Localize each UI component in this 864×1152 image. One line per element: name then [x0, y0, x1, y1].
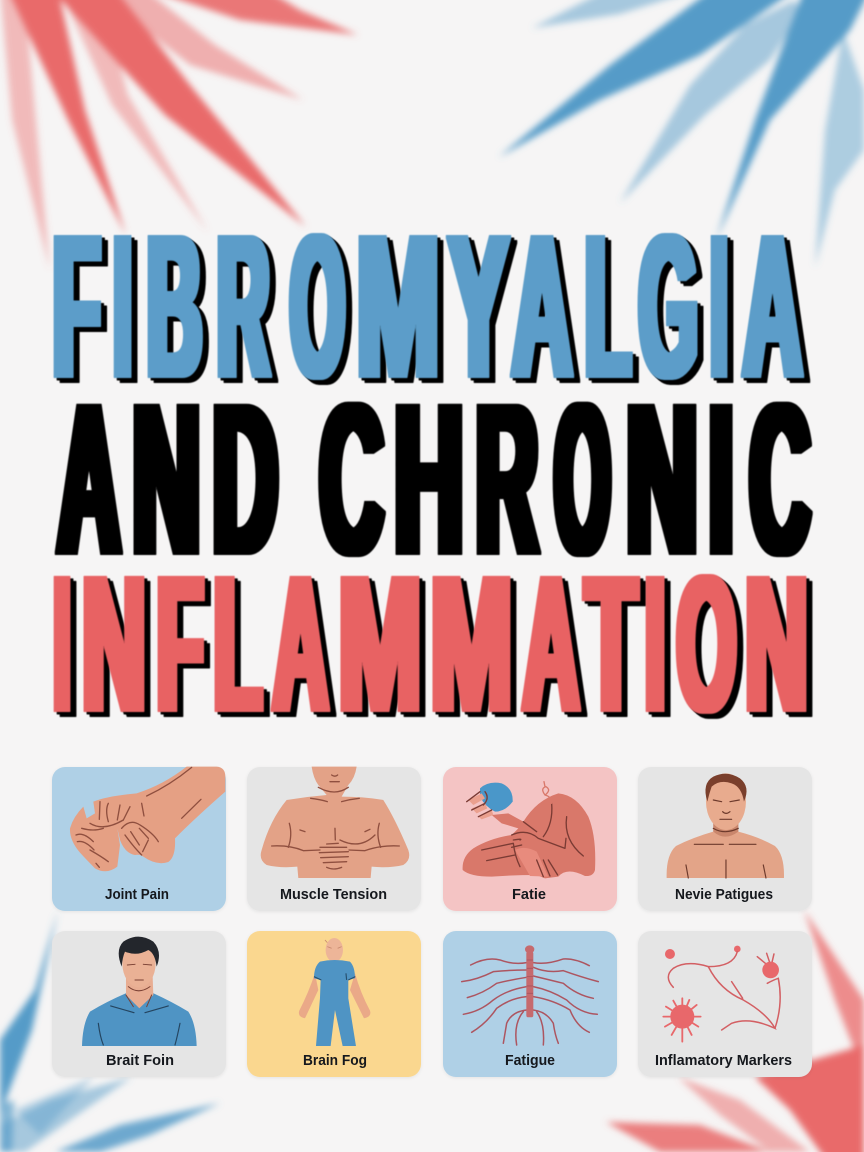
title: FIBROMYALGIA: F: [53, 193, 100, 419]
panel: Nevie Patigues: [638, 767, 812, 911]
title: INFLAMMATION: L: [214, 536, 262, 751]
panel: Brain Fog: [247, 931, 421, 1077]
title: FIBROMYALGIA: I: [114, 193, 131, 419]
rays: bottom-left blue burst: [0, 910, 220, 1152]
title: FIBROMYALGIA: O: [293, 196, 348, 422]
title: INFLAMMATION: F: [163, 541, 209, 756]
title: INFLAMMATION: T: [591, 541, 643, 756]
icon: torso with clasped hands: [261, 767, 409, 878]
title: INFLAMMATION: I: [648, 538, 668, 754]
title: INFLAMMATION: T: [588, 538, 640, 754]
title: FIBROMYALGIA: R: [220, 196, 272, 422]
title: INFLAMMATION: I: [645, 536, 665, 751]
title: AND CHRONIC: N: [626, 360, 698, 599]
title: FIBROMYALGIA: [53, 193, 808, 424]
title: INFLAMMATION: T: [585, 536, 637, 751]
panel: Muscle Tension: [247, 767, 421, 911]
icon: arm and shoulder with blue joint: [463, 782, 595, 878]
title: INFLAMMATION: O: [683, 541, 742, 756]
title: FIBROMYALGIA: Y: [449, 193, 508, 419]
title: FIBROMYALGIA: I: [714, 196, 730, 422]
title: INFLAMMATION: M: [430, 536, 512, 751]
label: Fatie: [512, 887, 546, 903]
label: Brain Fog: [303, 1053, 367, 1069]
label: Inflamatory Markers: [655, 1053, 792, 1069]
rays: bottom-right red burst: [606, 910, 864, 1152]
title: INFLAMMATION: L: [217, 538, 265, 754]
title: INFLAMMATION: A: [529, 541, 585, 756]
title: FIBROMYALGIA: I: [120, 198, 137, 424]
title: FIBROMYALGIA: B: [147, 193, 202, 419]
title: FIBROMYALGIA: O: [296, 198, 351, 424]
title: INFLAMMATION: A: [523, 536, 579, 751]
panel: Inflamatory Markers: [638, 931, 812, 1077]
title: FIBROMYALGIA: G: [639, 193, 698, 419]
panel: Joint Pain: [52, 767, 226, 911]
title: FIBROMYALGIA: M: [362, 198, 446, 424]
title: AND CHRONIC: R: [476, 360, 538, 599]
title: INFLAMMATION: [54, 536, 814, 756]
title: INFLAMMATION: N: [88, 541, 152, 756]
icon: painful hands: [70, 767, 225, 871]
title: INFLAMMATION: O: [680, 538, 739, 754]
title: FIBROMYALGIA: I: [711, 193, 727, 419]
title: INFLAMMATION: O: [677, 536, 736, 751]
title: FIBROMYALGIA: M: [359, 196, 443, 422]
title: FIBROMYALGIA: I: [717, 198, 733, 424]
title: INFLAMMATION: A: [526, 538, 582, 754]
title: FIBROMYALGIA: B: [150, 196, 205, 422]
title: INFLAMMATION: I: [54, 536, 70, 751]
label: Muscle Tension: [280, 887, 387, 903]
icon: man portrait bare shoulders: [667, 773, 784, 878]
label: Nevie Patigues: [675, 887, 773, 903]
rays: top-left red burst: [0, 0, 358, 270]
title: FIBROMYALGIA: A: [515, 196, 575, 422]
title: INFLAMMATION: N: [82, 536, 146, 751]
title: AND CHRONIC: D: [213, 360, 278, 599]
title: FIBROMYALGIA: L: [588, 196, 634, 422]
title: AND CHRONIC: N: [133, 360, 200, 599]
title: FIBROMYALGIA: M: [356, 193, 440, 419]
title: INFLAMMATION: A: [276, 538, 331, 754]
title: INFLAMMATION: A: [279, 541, 334, 756]
title: AND CHRONIC: I: [709, 360, 733, 599]
title: AND CHRONIC: H: [395, 360, 463, 599]
title: AND CHRONIC: [58, 360, 810, 599]
title: FIBROMYALGIA: A: [518, 198, 578, 424]
panel: Brait Foin: [52, 931, 226, 1077]
title: INFLAMMATION: I: [60, 541, 76, 756]
title: INFLAMMATION: M: [341, 538, 425, 754]
title: INFLAMMATION: I: [57, 538, 73, 754]
title: AND CHRONIC: A: [58, 360, 120, 599]
panel: Fatie: [443, 767, 617, 911]
title: INFLAMMATION: L: [220, 541, 268, 756]
title: INFLAMMATION: M: [344, 541, 428, 756]
title: FIBROMYALGIA: I: [117, 196, 134, 422]
panel: Fatigue: [443, 931, 617, 1077]
title: FIBROMYALGIA: Y: [455, 198, 514, 424]
label: Joint Pain: [105, 887, 169, 903]
title: INFLAMMATION: M: [338, 536, 422, 751]
icon: spine and nerves: [462, 945, 598, 1045]
rays: top-right blue burst: [499, 0, 864, 267]
title: AND CHRONIC: O: [555, 360, 610, 599]
title: FIBROMYALGIA: R: [217, 193, 269, 419]
title: INFLAMMATION: F: [157, 536, 203, 751]
title: AND CHRONIC: C: [320, 360, 383, 599]
icon: man in blue shirt: [82, 937, 197, 1046]
title: FIBROMYALGIA: F: [56, 196, 103, 422]
icon: standing figure in blue: [299, 938, 370, 1046]
label: Brait Foin: [106, 1053, 174, 1069]
title: FIBROMYALGIA: F: [59, 198, 106, 424]
title: FIBROMYALGIA: O: [290, 193, 345, 419]
title: INFLAMMATION: F: [160, 538, 206, 754]
title: FIBROMYALGIA: L: [585, 193, 631, 419]
icon: inflammation cells and nerves: [663, 946, 780, 1042]
title: INFLAMMATION: M: [436, 541, 518, 756]
title: FIBROMYALGIA: B: [153, 198, 208, 424]
title: INFLAMMATION: M: [433, 538, 516, 754]
title: INFLAMMATION: I: [651, 541, 671, 756]
title: FIBROMYALGIA: Y: [452, 196, 511, 422]
title: FIBROMYALGIA: A: [512, 193, 572, 419]
title: INFLAMMATION: N: [85, 538, 149, 754]
title: FIBROMYALGIA: G: [642, 196, 701, 422]
title: FIBROMYALGIA: R: [223, 198, 275, 424]
label: Fatigue: [505, 1053, 555, 1069]
title: FIBROMYALGIA: G: [645, 198, 704, 424]
title: INFLAMMATION: A: [273, 536, 328, 751]
title: FIBROMYALGIA: L: [591, 198, 637, 424]
